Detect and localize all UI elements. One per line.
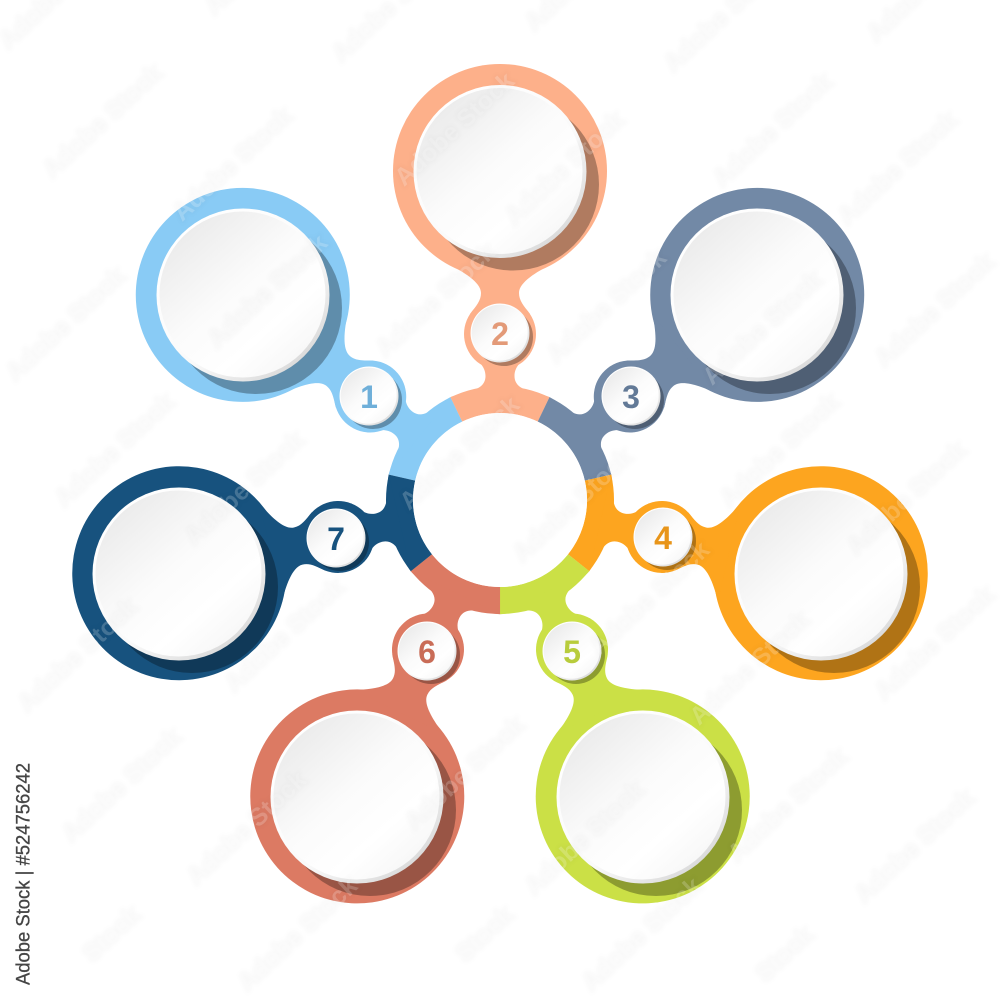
icon: empty disc 2: [414, 85, 599, 270]
badge 6: 6: [418, 634, 436, 670]
segment 7: navy: [51, 413, 447, 701]
icon: empty disc 5: [556, 710, 742, 896]
icon: empty disc 3: [670, 208, 856, 394]
segment 6: terracotta: [214, 524, 562, 939]
badge 1: [340, 366, 402, 429]
badge 5: 5: [563, 634, 581, 670]
segment 5: lime green: [438, 524, 786, 939]
badge 7: [306, 508, 369, 571]
center circle: [413, 413, 587, 587]
icon: empty disc 7: [92, 488, 278, 673]
badge 4: 4: [654, 520, 672, 556]
stock id text: Adobe Stock | #524756242: [14, 763, 34, 985]
icon: empty disc 6: [270, 710, 456, 896]
badge 7: 7: [327, 521, 345, 557]
badge 4: [634, 508, 696, 570]
badge 3: 3: [622, 379, 640, 415]
icon: empty disc 1: [156, 208, 342, 394]
segment 2: peach: [393, 64, 607, 422]
badge 2: 2: [491, 316, 509, 352]
badge 1: 1: [360, 379, 378, 415]
badge 5: [542, 622, 605, 684]
segment 4: orange: [553, 413, 949, 701]
segment 1: light blue: [92, 145, 505, 535]
badge 3: [602, 366, 664, 429]
badge 6: [398, 622, 460, 684]
segment 3: slate blue: [495, 145, 908, 535]
badge 2: [470, 304, 533, 366]
icon: empty disc 4: [734, 488, 920, 673]
